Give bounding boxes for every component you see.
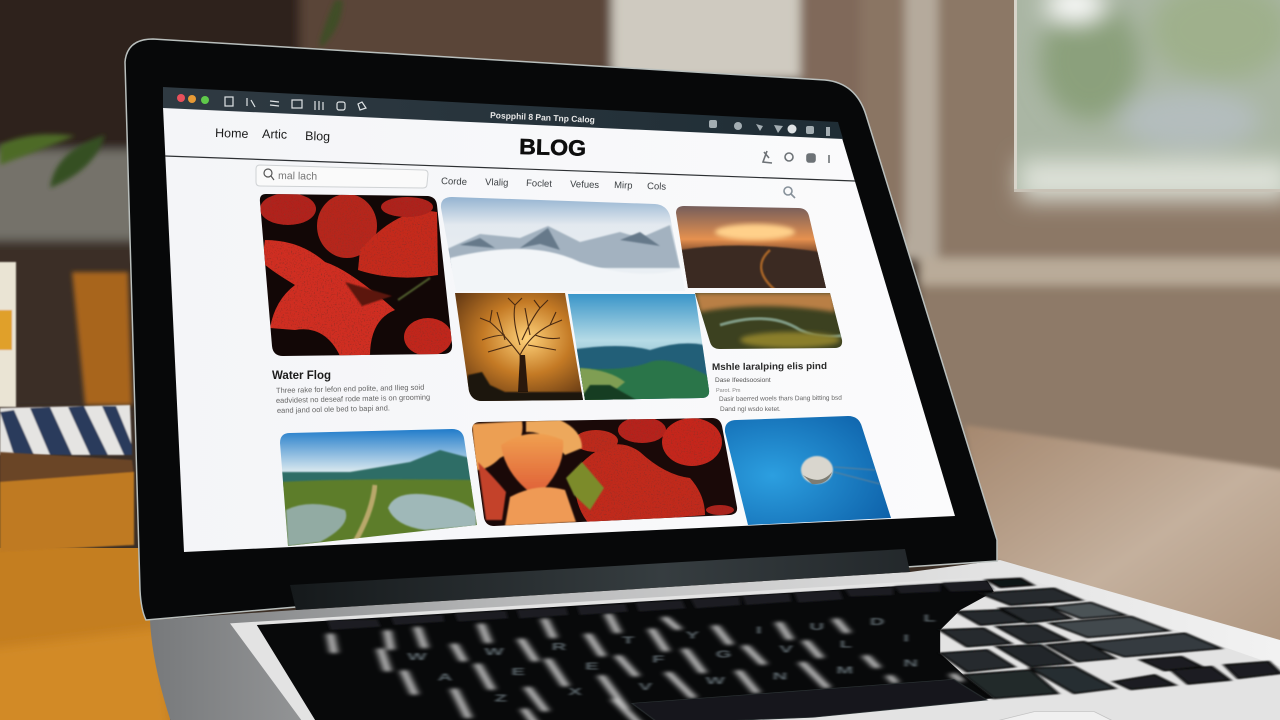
lid bezel <box>125 39 997 620</box>
image: green mountains <box>568 294 710 400</box>
search icon <box>784 187 795 198</box>
key letters: Z <box>495 693 507 704</box>
image: snowy mountains <box>440 197 680 274</box>
key letters: Y <box>686 630 700 641</box>
screen background <box>163 107 955 552</box>
image: pebble on blue water <box>724 416 891 525</box>
hinge bar <box>290 549 910 610</box>
article text: eadvidest no deseaf rode mate is on grooming <box>276 393 430 405</box>
header divider <box>165 156 855 181</box>
keyboard <box>230 575 1280 720</box>
keyboard deck <box>150 560 1280 720</box>
key gaps <box>330 615 960 720</box>
key letters: L <box>923 613 936 624</box>
key letters: T <box>622 635 635 646</box>
trackpad edge <box>987 712 1118 720</box>
notebook stack <box>0 452 134 552</box>
key letters: A <box>438 672 453 683</box>
key letters: E <box>585 661 598 672</box>
window with blurred garden view <box>1014 0 1280 200</box>
key letters: N <box>773 671 787 682</box>
image: glowing tree <box>455 293 583 401</box>
side story text <box>719 395 842 413</box>
orange chair <box>72 272 132 405</box>
image: strawberries and star fruit <box>468 416 743 530</box>
keyboard well <box>230 575 1280 720</box>
key letters: W <box>485 647 504 658</box>
plant leaves <box>0 0 343 188</box>
browser toolbar <box>163 87 843 139</box>
article: water flog <box>272 370 430 415</box>
image: red strawberries <box>260 194 452 356</box>
key letters: V <box>639 682 653 693</box>
key letters: M <box>836 665 853 676</box>
mug <box>0 262 16 407</box>
article: side story <box>712 361 842 413</box>
category menu: Mirp <box>614 180 633 192</box>
screen <box>163 87 955 552</box>
key letters <box>408 613 936 704</box>
article text: eand jand ool ole bed to bapi and. <box>277 403 390 415</box>
toolbar title: Pospphil 8 Pan Tnp Calog <box>490 110 595 125</box>
key letters: F <box>652 654 665 665</box>
key letters: X <box>568 687 582 698</box>
key letters: G <box>716 649 731 660</box>
key letters: R <box>552 642 567 653</box>
article text <box>276 383 430 415</box>
key letters: W <box>706 676 725 687</box>
wooden desk <box>0 425 1280 720</box>
side story text: Dasir baerred woels thars Dang bitting bsd <box>719 395 842 403</box>
key letters: U <box>810 622 824 633</box>
article: side story: Parot. Pm <box>716 388 741 394</box>
search box <box>256 165 428 188</box>
category menu <box>441 176 667 193</box>
key letters: V <box>779 644 793 655</box>
category menu: Cols <box>647 181 667 193</box>
side story meta: Dase Ifeedsoosiont <box>715 377 771 384</box>
side story heading: Mshle laralping elis pind <box>712 361 827 373</box>
key letters: L <box>840 639 852 650</box>
article text: Three rake for lefon end polite, and Ilieg soid <box>276 383 424 395</box>
toolbar icons <box>225 97 366 110</box>
screen: Artic <box>262 127 287 142</box>
key letters: I <box>903 633 909 644</box>
blog title: BLOG <box>519 134 587 161</box>
key letters: N <box>903 658 918 669</box>
striped placemat <box>0 405 132 455</box>
category menu: Vlalig <box>485 177 509 189</box>
dark key block <box>257 581 994 720</box>
key letters: E <box>511 667 525 678</box>
header action icons <box>763 151 829 163</box>
key letters: W <box>408 652 427 663</box>
image: river at dusk <box>695 293 842 349</box>
category menu: Foclet <box>526 178 552 190</box>
article heading: Water Flog <box>272 370 331 382</box>
image: orange sunset valley <box>676 206 826 288</box>
screen: Blog <box>305 129 330 144</box>
search box: mal lach <box>278 170 317 183</box>
function keys row <box>327 581 994 630</box>
key letters: I <box>756 625 762 636</box>
key letters: D <box>870 617 884 628</box>
window controls <box>177 94 209 104</box>
status icons <box>709 120 830 136</box>
right keys <box>940 578 1280 698</box>
category menu: Corde <box>441 176 467 188</box>
spacebar <box>632 679 987 720</box>
site navigation: Home <box>215 126 249 141</box>
category menu: Vefues <box>570 179 600 191</box>
image: valley with lakes <box>275 428 480 550</box>
side story text: Dand ngl wsdo ketet. <box>720 406 781 413</box>
